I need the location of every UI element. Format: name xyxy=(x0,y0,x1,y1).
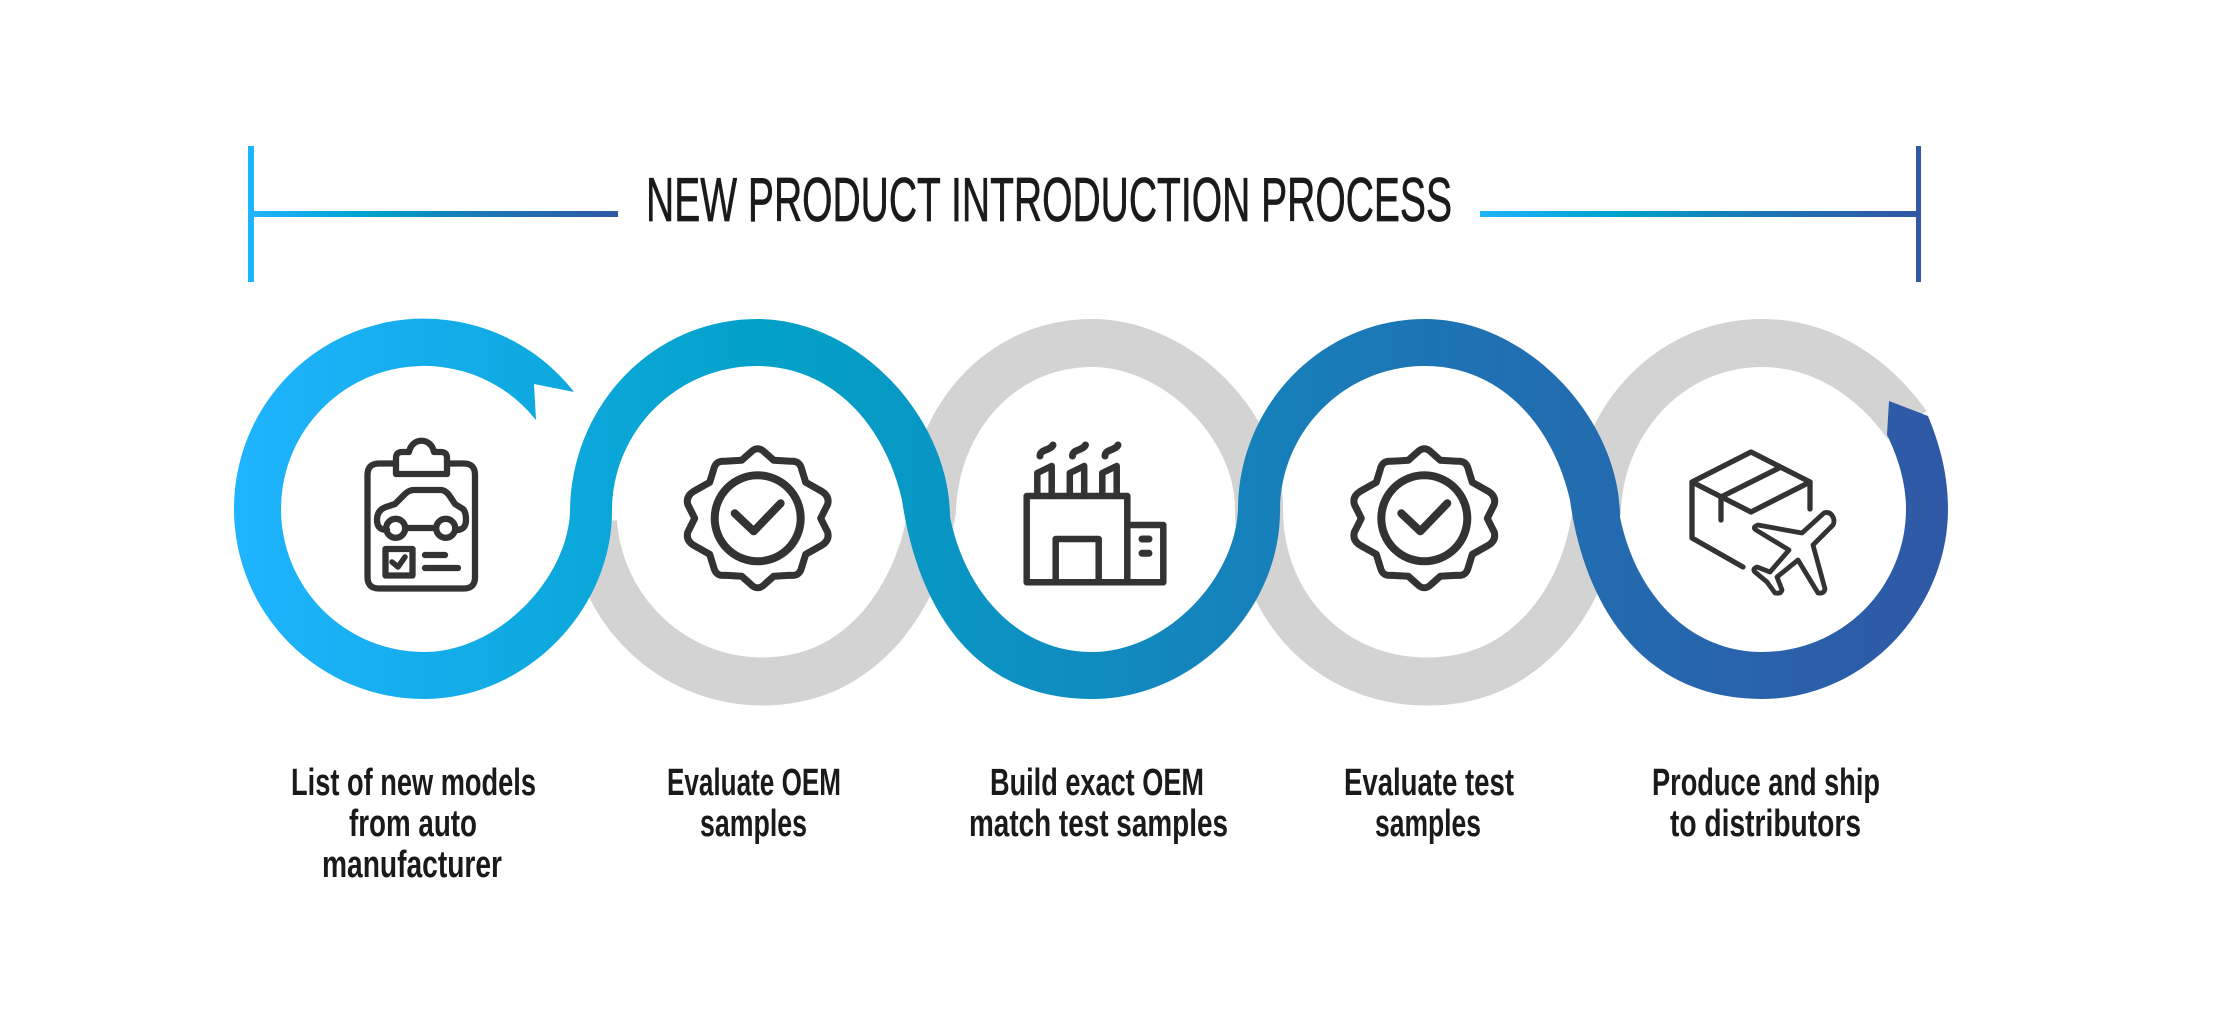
step 1 label: manufacturer xyxy=(322,844,502,886)
gradient process ribbon xyxy=(234,319,1948,699)
grey background ribbon xyxy=(593,343,1907,682)
step 5 label: to distributors xyxy=(1670,803,1861,845)
icon: quality badge 2 xyxy=(1354,449,1495,588)
step 2 label: samples xyxy=(700,803,807,845)
icon: box and airplane xyxy=(1692,452,1834,593)
step 3 label: match test samples xyxy=(969,803,1228,845)
step 5 label xyxy=(1652,762,1880,845)
icon: factory xyxy=(1027,445,1163,582)
step 1 label xyxy=(291,762,536,886)
step 4 label: Evaluate test xyxy=(1344,762,1514,804)
step 2 label xyxy=(667,762,841,845)
header bracket right xyxy=(1480,146,1921,282)
step 2 label: Evaluate OEM xyxy=(667,762,841,804)
step 4 label: samples xyxy=(1375,803,1481,845)
step 3 label: Build exact OEM xyxy=(990,762,1204,804)
step 1 label: from auto xyxy=(349,803,477,845)
icon: clipboard with car xyxy=(368,441,475,588)
title: NEW PRODUCT INTRODUCTION PROCESS xyxy=(646,166,1452,235)
step 4 label xyxy=(1344,762,1514,845)
icon: quality badge 1 xyxy=(687,449,828,588)
step 5 label: Produce and ship xyxy=(1652,762,1880,804)
step 1 label: List of new models xyxy=(291,762,536,804)
step 3 label xyxy=(969,762,1228,845)
header bracket left xyxy=(248,146,618,282)
